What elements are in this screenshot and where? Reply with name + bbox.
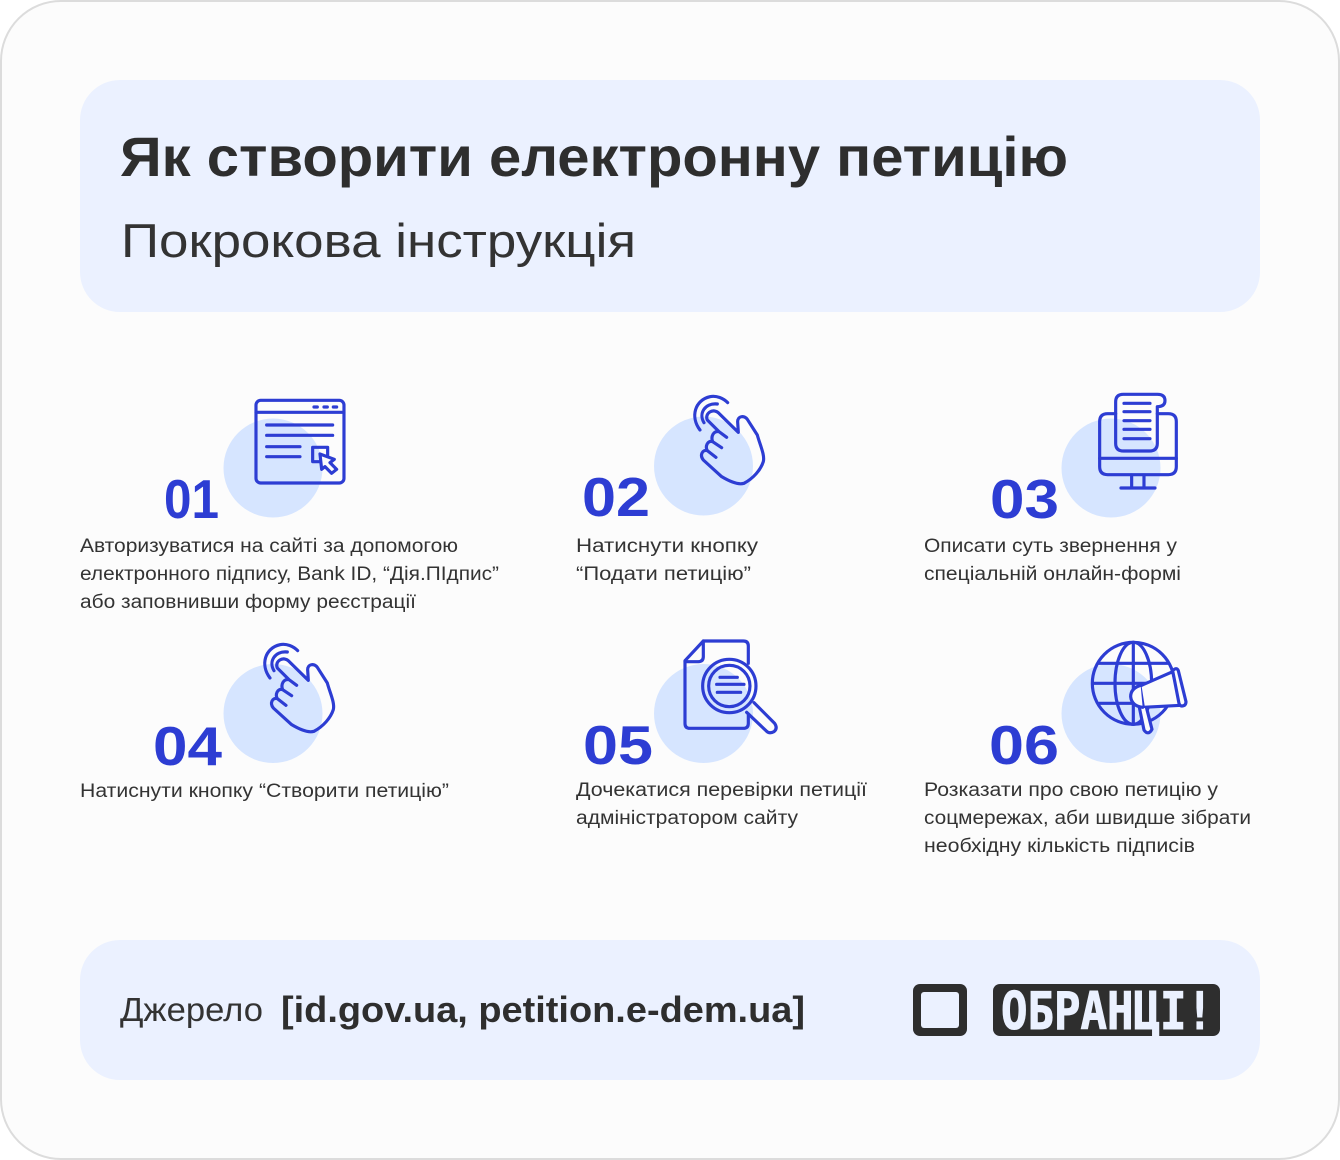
icon: tapping hand [695, 396, 764, 484]
title: Як створити електронну петицію [120, 125, 1068, 188]
icon: monitor with document [1100, 394, 1176, 488]
text: step 01: електронного підпису, Bank ID, “Дія.ПІдпис” [80, 564, 499, 585]
text: step 03: спеціальній онлайн-формі [924, 564, 1181, 585]
logo: wordmark: ОБРАНЦІ! [1001, 982, 1213, 1042]
text: step 05: Дочекатися перевірки петиції [576, 780, 868, 801]
number 03: 03 [990, 468, 1059, 530]
text: step 02: “Подати петицію” [576, 564, 751, 585]
step 04 [80, 644, 449, 802]
panel: footer [80, 940, 1260, 1080]
text: step 06: Розказати про свою петицію у [924, 780, 1219, 801]
text: step 05: адміністратором сайту [576, 808, 799, 829]
number 01: 01 [164, 468, 219, 530]
text: step 06: соцмережах, аби швидше зібрати [924, 808, 1251, 829]
panel: header [80, 80, 1260, 312]
logo: checkbox [913, 984, 967, 1036]
text: step 06: необхідну кількість підписів [924, 836, 1195, 857]
text: step 03: Описати суть звернення у [924, 536, 1178, 557]
icon: browser window with cursor [256, 400, 344, 483]
step 05 [576, 641, 868, 829]
text: step 01: або заповнивши форму реєстрації [80, 592, 417, 613]
text: step 01: Авторизуватися на сайті за допомогою [80, 536, 458, 557]
subtitle: Покрокова інструкція [121, 214, 636, 267]
step 03 [924, 394, 1181, 585]
text: step 02: Натиснути кнопку [576, 536, 759, 557]
step 01 [80, 400, 499, 613]
icon: document with magnifier [685, 641, 776, 733]
source links: [id.gov.ua, petition.e-dem.ua] [281, 989, 805, 1030]
step 02 [576, 396, 764, 585]
number 05: 05 [583, 714, 653, 776]
number 02: 02 [582, 466, 650, 528]
step 06 [924, 642, 1251, 857]
number 04: 04 [153, 715, 222, 777]
icon: tapping hand [265, 644, 334, 732]
source label: Джерело [120, 991, 263, 1028]
text: step 04: Натиснути кнопку “Створити петицію” [80, 781, 449, 802]
number 06: 06 [989, 714, 1059, 776]
icon: globe with megaphone [1092, 642, 1186, 733]
